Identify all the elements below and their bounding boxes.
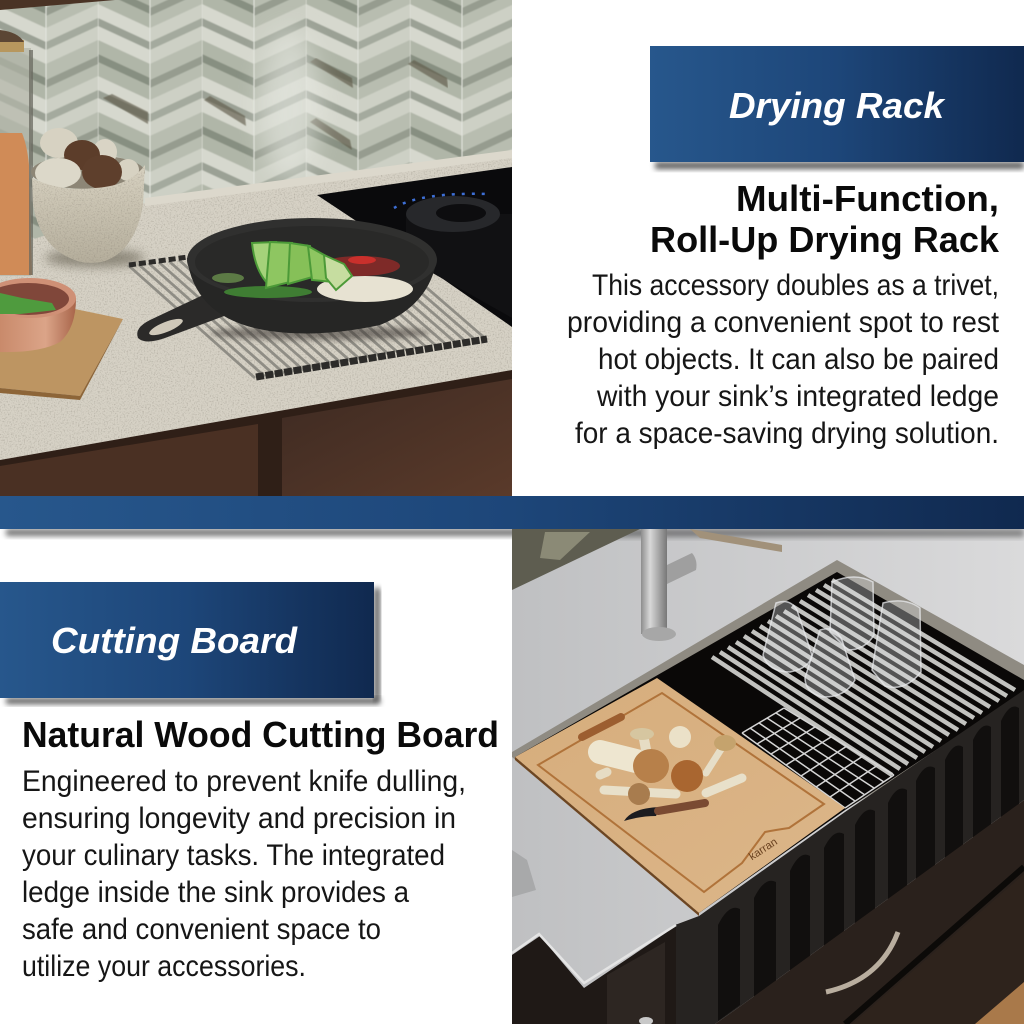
heading: Natural Wood Cutting Board: Natural Wood Cutting Board bbox=[22, 714, 499, 755]
bowl shadow bbox=[45, 249, 145, 267]
speckled stone countertop bbox=[0, 155, 512, 460]
roll-up drying rack rods bbox=[712, 580, 1015, 775]
board handle cutout bbox=[582, 717, 621, 737]
countertop rear edge bbox=[145, 150, 512, 206]
divider band bbox=[0, 496, 1024, 536]
rack rail far edge bbox=[129, 257, 188, 265]
apron flutes bbox=[718, 707, 1019, 1021]
body text: cutting board description: ensuring longevity and precision in bbox=[22, 802, 456, 835]
body text: drying rack description: providing a convenient spot to rest bbox=[567, 306, 1000, 339]
cabinets bbox=[0, 360, 512, 496]
heading: Multi-Function, Roll-Up Drying Rack: Multi-Function, bbox=[736, 178, 999, 219]
blue indicator lights bbox=[394, 194, 490, 208]
body text: drying rack description: for a space-saving drying solution. bbox=[575, 417, 999, 450]
greens bbox=[224, 286, 312, 298]
juice groove bbox=[538, 693, 824, 892]
body text: cutting board description: Engineered to prevent knife dulling, bbox=[22, 765, 466, 798]
banner: Cutting Board: Cutting Board bbox=[51, 620, 298, 661]
copper bowl with greens bbox=[0, 278, 76, 352]
drawer pull handle bbox=[826, 932, 898, 992]
banner: Drying Rack: Drying Rack bbox=[729, 85, 946, 126]
lower left cabinet bbox=[512, 926, 676, 1024]
ceramic bowl bbox=[32, 165, 145, 263]
glass jar with juice bbox=[0, 30, 33, 276]
bowl interior bbox=[31, 155, 145, 189]
wooden board front edge bbox=[0, 319, 123, 400]
body text: cutting board description: utilize your accessories. bbox=[22, 950, 306, 983]
left cabinet door bbox=[0, 424, 258, 496]
fluted black apron bbox=[675, 690, 1024, 1024]
heading: Multi-Function, Roll-Up Drying Rack bbox=[650, 178, 1000, 260]
cast iron skillet bbox=[137, 218, 437, 342]
body text: cutting board description: safe and convenient space to bbox=[22, 913, 381, 946]
banner: Cutting Board bbox=[0, 582, 380, 704]
bamboo cutting board bbox=[515, 678, 845, 916]
counter steel edge bbox=[512, 925, 676, 983]
shadow under divider bbox=[512, 529, 1024, 537]
body text: cutting board description: your culinary tasks. The integrated bbox=[22, 839, 445, 872]
body text: drying rack description bbox=[567, 269, 1000, 450]
wood floor bbox=[975, 982, 1024, 1024]
burner knob bbox=[433, 272, 444, 280]
body text: cutting board description: ledge inside the sink provides a bbox=[22, 876, 409, 909]
body text: cutting board description bbox=[22, 765, 466, 983]
wooden board bbox=[0, 308, 123, 396]
steam bbox=[260, 30, 320, 180]
knife bbox=[624, 803, 705, 821]
folded towel bbox=[512, 850, 536, 897]
skillet handle bbox=[137, 296, 224, 342]
heading: Multi-Function, Roll-Up Drying Rack: Roll-Up Drying Rack bbox=[650, 219, 1000, 260]
drinking glasses bbox=[763, 577, 921, 697]
brick wall corner bbox=[512, 529, 640, 590]
egg white bbox=[317, 276, 413, 302]
photo: kitchen counter with skillet on roll-up drying rack bbox=[0, 0, 516, 496]
rack rail near edge bbox=[256, 339, 487, 377]
rack rods bbox=[127, 260, 488, 379]
faucet bbox=[641, 529, 782, 641]
eggs bbox=[35, 128, 139, 189]
sink basin bbox=[515, 572, 1024, 913]
tomatoes bbox=[334, 256, 400, 276]
sink steel rim bbox=[512, 560, 1024, 913]
photo: farmhouse sink with cutting board and drying rack bbox=[512, 529, 1024, 1024]
brand mark: karran bbox=[747, 836, 780, 863]
banner: Drying Rack bbox=[650, 46, 1024, 169]
body text: drying rack description: with your sink’s integrated ledge bbox=[596, 380, 999, 413]
skillet shadow bbox=[210, 326, 430, 340]
chevron tile backsplash bbox=[0, 0, 512, 240]
body text: drying rack description: hot objects. It can also be paired bbox=[598, 343, 999, 376]
skillet body bbox=[187, 258, 437, 333]
white stone countertop bbox=[512, 529, 1024, 1024]
wire bottom grid bbox=[742, 708, 894, 808]
avocado slices bbox=[252, 242, 352, 290]
roll-up drying rack bbox=[128, 241, 487, 378]
mushrooms bbox=[600, 726, 742, 805]
base cabinet drawers bbox=[715, 800, 1024, 1024]
right cabinet door bbox=[282, 379, 512, 496]
upper cabinet edge bbox=[0, 0, 115, 10]
induction cooktop bbox=[317, 167, 512, 327]
